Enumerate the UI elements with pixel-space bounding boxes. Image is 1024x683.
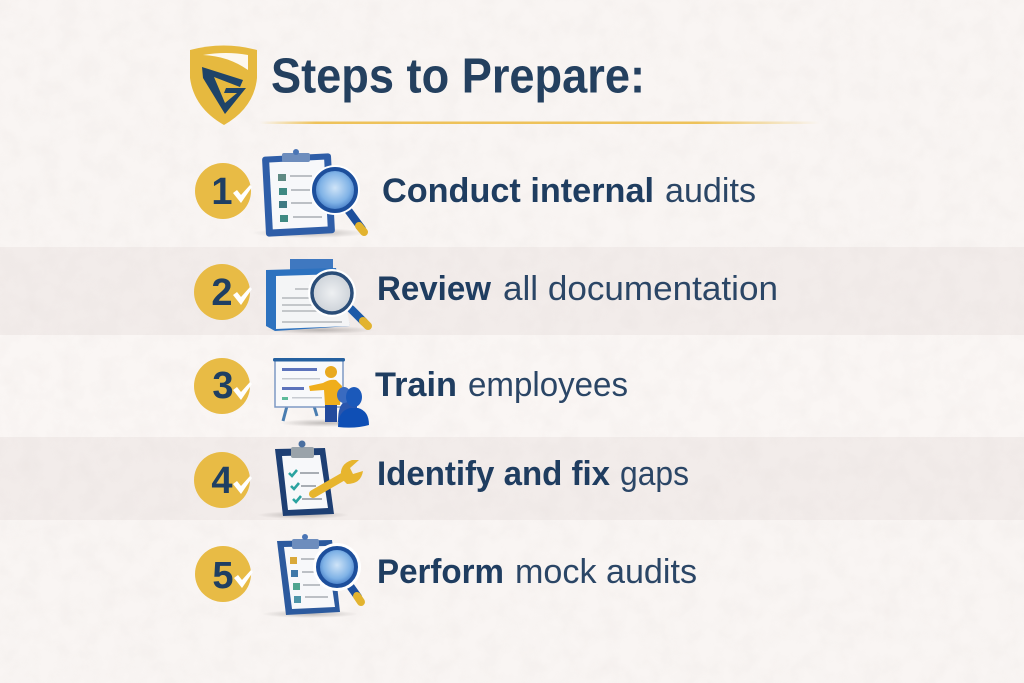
number badge 3 [194, 358, 252, 414]
label 2: Review [377, 270, 492, 308]
label 5: mock audits [515, 553, 697, 591]
number badge 1 [195, 163, 252, 219]
label 2: all documentation [503, 270, 778, 308]
number badge 2: 2 [211, 272, 233, 314]
title: Steps to Prepare: [271, 50, 645, 104]
label 3: employees [468, 366, 628, 404]
label 4: Identify and fix [377, 455, 610, 493]
step 2 [194, 259, 778, 334]
number badge 1: 1 [211, 171, 233, 213]
icon: checklist with magnifier [262, 534, 361, 618]
step 5 [195, 534, 697, 618]
label 2 [377, 270, 778, 308]
logo: shield [190, 46, 257, 125]
step 1 [195, 149, 756, 238]
title underline [260, 122, 820, 124]
label 1: Conduct internal [382, 172, 654, 210]
label 3 [375, 366, 628, 404]
number badge 4: 4 [211, 460, 233, 502]
label 3: Train [375, 366, 457, 404]
icon: clipboard with wrench [257, 440, 363, 519]
number badge 4 [194, 452, 252, 508]
label 5: Perform [377, 553, 504, 591]
icon: clipboard with magnifier [252, 149, 368, 238]
label 1: audits [665, 172, 756, 210]
icon: trainer at board [273, 358, 371, 428]
number badge 3: 3 [212, 365, 234, 407]
label 4: gaps [620, 455, 689, 493]
label 5 [377, 553, 697, 591]
step 3 [194, 358, 628, 428]
number badge 5: 5 [212, 555, 234, 597]
icon: documents with magnifier [265, 259, 375, 334]
step 4 [194, 440, 689, 519]
number badge 5 [195, 546, 253, 602]
number badge 2 [194, 264, 252, 320]
